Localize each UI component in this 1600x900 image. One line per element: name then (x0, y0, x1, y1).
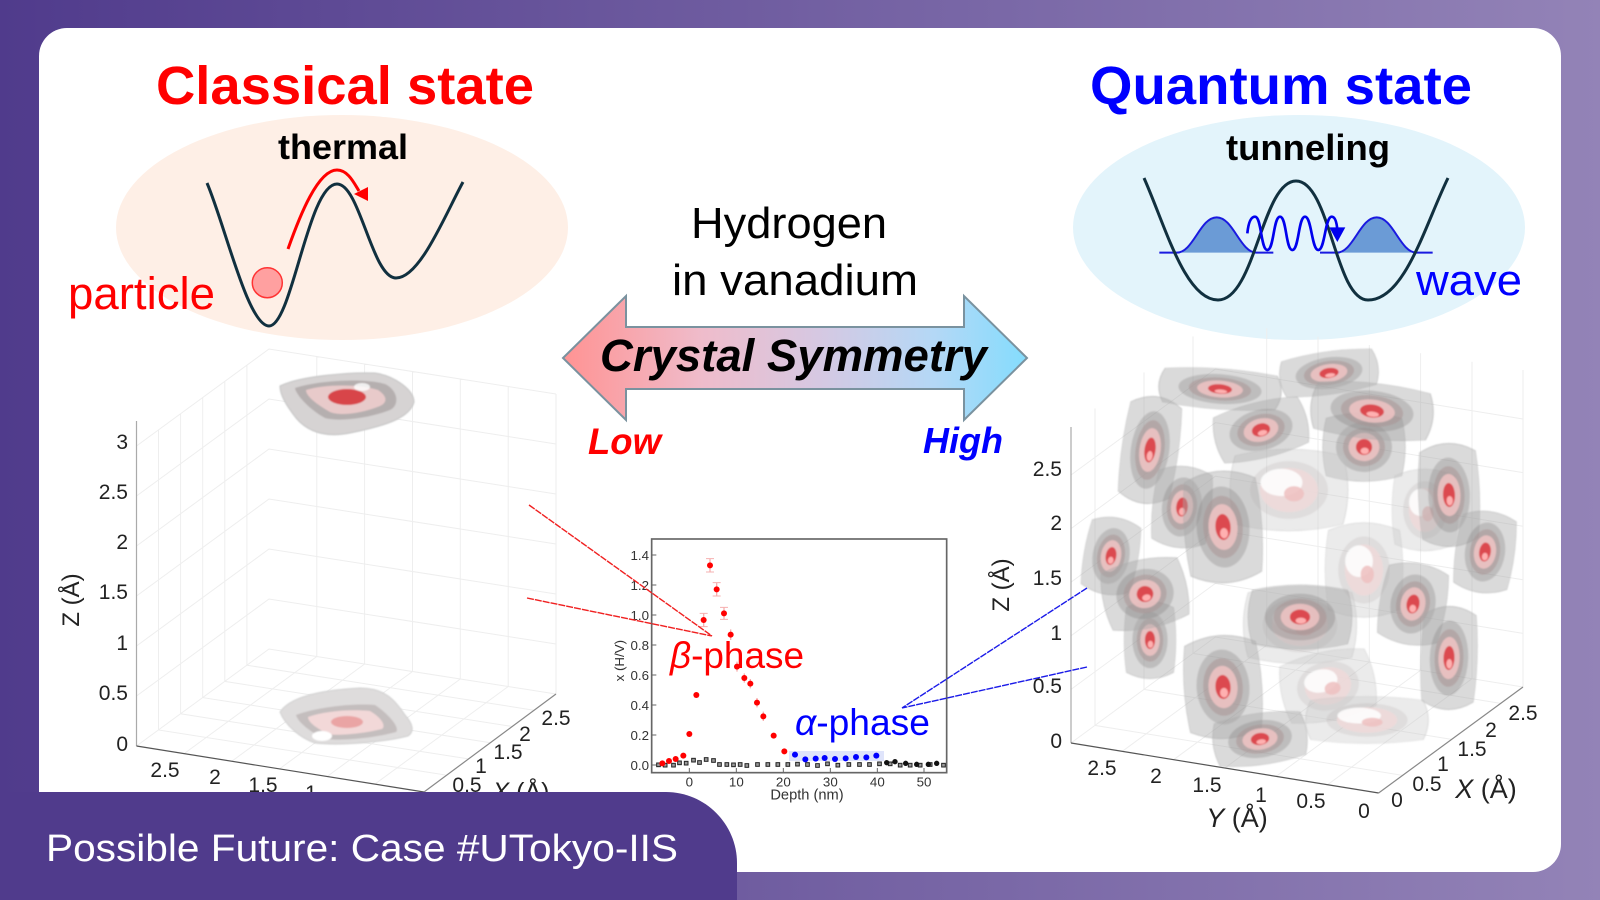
arrow: thermal hop (288, 170, 368, 249)
y tick labels: 0.8 (630, 638, 649, 653)
x axis labels: 0 (1391, 789, 1403, 812)
z axis labels: 1 (116, 632, 128, 655)
label: alpha phase: α-phase (795, 702, 930, 743)
center title: hydrogen in vanadium: Hydrogen (691, 199, 887, 248)
z axis labels: 1 (1050, 622, 1062, 645)
x axis labels: 1 (1437, 753, 1449, 776)
double arrow: crystal symmetry (563, 296, 1027, 420)
x axis labels: 2 (1485, 719, 1497, 742)
y axis labels (1087, 757, 1370, 823)
x tick labels: 40 (870, 775, 885, 790)
x tick labels: 20 (776, 775, 791, 790)
density blobs: tetrahedral sites (1078, 345, 1520, 771)
y axis labels: 1.5 (493, 741, 523, 764)
callout lines: alpha phase (902, 588, 1087, 708)
double well potential (207, 182, 463, 326)
heading: classical state: Classical state (156, 56, 534, 116)
label: particle: particle (68, 268, 215, 319)
z axis labels: 2 (1050, 512, 1062, 535)
callout lines: beta phase (527, 505, 712, 636)
wave packets (1159, 217, 1433, 253)
3D plot: classical density (57, 349, 571, 806)
label: thermal: thermal (278, 128, 408, 167)
z axis labels: 3 (116, 431, 128, 454)
y axis labels: 1 (475, 755, 487, 778)
panel: classical state (68, 56, 568, 340)
y axis labels: 0.5 (1296, 790, 1326, 813)
y axis labels (150, 707, 571, 805)
y axis labels: 1.5 (1192, 774, 1222, 797)
label: low: Low (588, 421, 663, 462)
footer tab: Possible Future: Case #UTokyo-IIS (46, 828, 678, 870)
density blob: upper site (280, 373, 414, 435)
x axis labels: 2.5 (1508, 702, 1538, 725)
y axis labels: 2 (209, 766, 221, 789)
label: tunneling: tunneling (1226, 127, 1390, 168)
center title: hydrogen in vanadium (672, 199, 918, 305)
y tick labels: 1.4 (630, 548, 650, 563)
axis title: X: X (Å) (492, 776, 549, 806)
x axis labels: 0.5 (1412, 773, 1442, 796)
y axis labels: 2 (519, 723, 531, 746)
z axis labels: 1.5 (99, 581, 128, 604)
chart: hydrogen depth profile (612, 539, 947, 803)
center title: hydrogen in vanadium: in vanadium (672, 256, 918, 305)
highlight: alpha band (789, 751, 884, 761)
z axis labels: 2 (116, 531, 128, 554)
z axis labels (99, 431, 128, 756)
y axis labels: 0.5 (452, 774, 482, 797)
y tick labels: 0.6 (630, 668, 649, 683)
y tick labels: 0.2 (630, 728, 649, 743)
footer tab (0, 792, 737, 900)
x axis labels (1391, 702, 1538, 812)
y tick labels (630, 548, 650, 773)
z axis labels: 0.5 (99, 682, 128, 705)
z axis labels: 1.5 (1033, 567, 1062, 590)
y axis labels: 2.5 (541, 707, 571, 730)
z axis labels: 0.5 (1033, 675, 1062, 698)
axis title: Y: Y (Å) (1206, 802, 1268, 833)
label: wave: wave (1415, 256, 1522, 305)
y axis labels: 2 (1150, 765, 1162, 788)
tunneling wave arrow (1247, 217, 1345, 250)
z axis labels (1033, 458, 1062, 753)
double well potential (1144, 178, 1448, 300)
y tick labels: 1.2 (630, 578, 649, 593)
y axis title: x (H/V) (612, 640, 627, 681)
series: beta phase points (659, 559, 787, 766)
y tick labels: 1.0 (630, 608, 649, 623)
label: high: High (923, 420, 1003, 461)
axis title: X: X (Å) (1454, 773, 1517, 804)
ellipse: quantum background (1073, 115, 1525, 340)
x axis title: Depth (nm) (770, 787, 844, 803)
y axis labels: 0 (1358, 800, 1370, 823)
heading: quantum state: Quantum state (1090, 56, 1472, 116)
double arrow: crystal symmetry: Crystal Symmetry (600, 330, 989, 381)
z axis labels: 0 (116, 733, 128, 756)
z axis labels: 0 (1050, 730, 1062, 753)
ellipse: classical background (116, 115, 568, 340)
x tick labels: 0 (686, 775, 693, 790)
label: beta phase: β-phase (669, 635, 804, 676)
y tick labels: 0.4 (630, 698, 650, 713)
z axis labels: 2.5 (99, 481, 128, 504)
x tick labels: 50 (917, 775, 931, 790)
x tick labels: 30 (823, 775, 838, 790)
3D plot: quantum density (987, 328, 1538, 833)
y tick labels: 0.0 (630, 758, 649, 773)
density blob: lower site (280, 688, 412, 744)
z axis labels: 2.5 (1033, 458, 1062, 481)
y axis labels: 2.5 (150, 759, 180, 782)
x axis labels: 1.5 (1457, 738, 1487, 761)
y axis labels: 2.5 (1087, 757, 1117, 780)
series: alpha phase points (792, 752, 879, 762)
x tick labels: 10 (729, 775, 744, 790)
x tick labels (686, 775, 931, 790)
panel: quantum state (1073, 56, 1525, 340)
y axis labels: 1 (305, 782, 317, 805)
y axis labels: 1 (1255, 784, 1267, 807)
axis title: Z: Z (Å) (987, 558, 1015, 612)
y axis labels: 1.5 (248, 774, 278, 797)
axis title: Z: Z (Å) (57, 573, 85, 627)
series: reference squares (657, 758, 945, 767)
series: black points (884, 759, 939, 767)
icon: particle (252, 268, 282, 298)
